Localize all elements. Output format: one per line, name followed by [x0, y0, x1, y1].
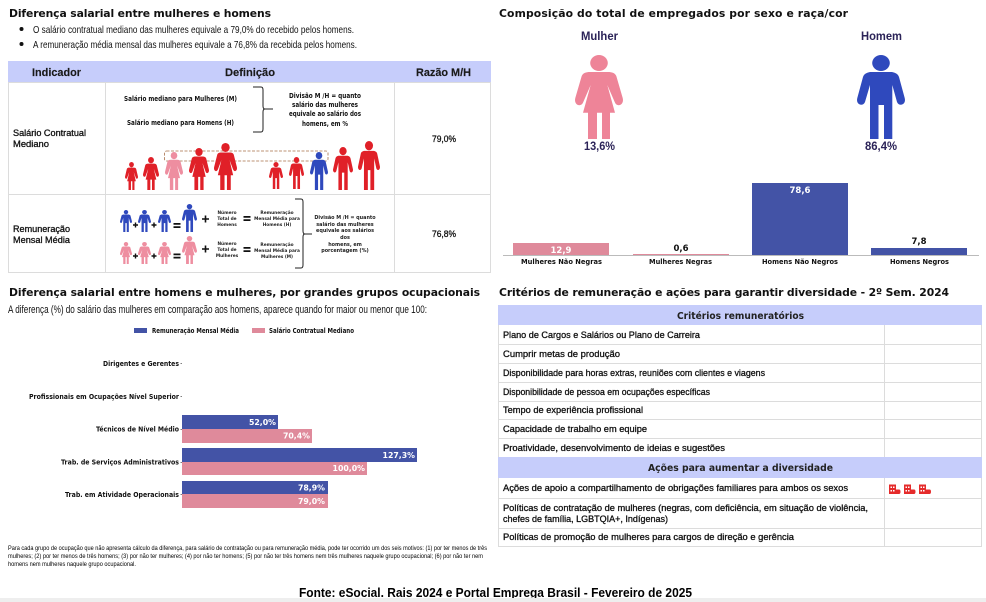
- definição: salário contratual mediano: salário das mulheres: [292, 101, 358, 109]
- panel: tabela de indicadores: [8, 61, 491, 273]
- definição: remuneração mensal média: Homens: [217, 222, 237, 228]
- gráfico de barras: grupos ocupacionais: 70,4%: [283, 432, 310, 440]
- panel: tabela de critérios: Plano de Cargos e Salários ou Plano de Carreira: [503, 330, 700, 340]
- panel: tabela de indicadores: Mediano: [13, 139, 49, 149]
- pictograma: mulher: 13,6%: [584, 141, 615, 153]
- panel: tabela de indicadores: Razão M/H: [416, 67, 471, 79]
- panel: tabela de critérios: Ações de apoio a compartilhamento de obrigações familiares para ambos os sexos: [503, 483, 849, 493]
- panel: tabela de critérios: Políticas de contratação de mulheres (negras, com deficiência, em situação de violência,: [503, 503, 868, 513]
- gráfico de barras: grupos ocupacionais: Trab. de Serviços Administrativos: [61, 458, 179, 466]
- gráfico de barras: grupos ocupacionais: Técnicos de Nível Médio: [96, 426, 179, 434]
- pictograma: mulher: [575, 31, 623, 153]
- definição: salário contratual mediano: homens, em %: [302, 120, 348, 128]
- definição: salário contratual mediano: Divisão M /H = quanto: [289, 92, 361, 100]
- fonte: Fonte: eSocial. Rais 2024 e Portal Emprega Brasil - Fevereiro de 2025: [299, 585, 692, 600]
- gráfico de barras: grupos ocupacionais: 78,9%: [298, 484, 325, 492]
- definição: remuneração mensal média: Mulheres (M): [261, 254, 293, 260]
- heading: composição: Composição do total de empregados por sexo e raça/cor: [499, 7, 849, 20]
- gráfico de barras: grupos ocupacionais: Trab. em Atividade Operacionais: [65, 491, 179, 499]
- nota de rodapé: homens nem mulheres naquele grupo ocupacional.: [8, 561, 136, 568]
- panel: tabela de indicadores: 76,8%: [432, 229, 456, 239]
- bullet list: A remuneração média mensal das mulheres equivale a 76,8% da recebida pelos homens.: [33, 39, 357, 51]
- gráfico de colunas: sexo e raça/cor: Mulheres Negras: [649, 258, 712, 266]
- panel: tabela de indicadores: Mensal Média: [13, 235, 70, 245]
- ícones: empresas: [889, 484, 931, 494]
- panel: tabela de indicadores: Indicador: [32, 67, 82, 79]
- subtítulo do gráfico: A diferença (%) do salário das mulheres em comparação aos homens, aparece quando for maior ou menor que 100:: [8, 304, 427, 316]
- heading: grandes grupos ocupacionais: Diferença salarial entre homens e mulheres, por grandes grupos ocupacionais: [9, 286, 480, 299]
- definição: remuneração mensal média: Homens (H): [263, 222, 291, 228]
- heading: critérios: Critérios de remuneração e ações para garantir diversidade - 2º Sem. 2024: [499, 286, 949, 299]
- panel: tabela de critérios: [498, 305, 982, 547]
- definição: remuneração mensal média: homens, em: [328, 242, 362, 248]
- panel: tabela de critérios: Capacidade de trabalho em equipe: [503, 424, 647, 434]
- pictograma: homem: [857, 31, 905, 153]
- panel: tabela de critérios: Disponibilidade de pessoa em ocupações específicas: [503, 387, 710, 397]
- definição: remuneração mensal média: Remuneração: [260, 210, 294, 216]
- panel: tabela de critérios: Critérios remuneratórios: [677, 310, 804, 322]
- gráfico de colunas: sexo e raça/cor: [503, 183, 979, 266]
- panel: tabela de critérios: Tempo de experiência profissional: [503, 405, 643, 415]
- legenda: Salário Contratual Mediano: [269, 327, 354, 335]
- gráfico de barras: grupos ocupacionais: Profissionais em Ocupações Nível Superior: [29, 393, 180, 401]
- gráfico de barras: grupos ocupacionais: Dirigentes e Gerentes: [103, 360, 179, 368]
- definição: remuneração mensal média: dos: [340, 235, 350, 241]
- gráfico de barras: grupos ocupacionais: 127,3%: [383, 451, 415, 460]
- definição: remuneração mensal média: porcentagem (%): [321, 248, 369, 254]
- gráfico de barras: grupos ocupacionais: [29, 360, 417, 508]
- gráfico de barras: grupos ocupacionais: 52,0%: [249, 418, 276, 427]
- gráfico de colunas: sexo e raça/cor: Homens Negros: [890, 258, 949, 266]
- definição: remuneração mensal média: Número: [217, 240, 237, 247]
- gráfico de colunas: sexo e raça/cor: 0,6: [673, 244, 689, 254]
- panel: tabela de indicadores: Remuneração: [13, 224, 70, 234]
- bullet list: O salário contratual mediano das mulheres equivale a 79,0% do recebido pelos homens.: [33, 24, 354, 36]
- pictograma: mulher: Mulher: [581, 31, 619, 43]
- panel: tabela de indicadores: Salário Contratual: [13, 128, 86, 138]
- pictograma: homem: 86,4%: [865, 141, 897, 153]
- definição: salário contratual mediano: [124, 87, 380, 190]
- gráfico de colunas: sexo e raça/cor: Homens Não Negros: [762, 258, 838, 266]
- gráfico de barras: grupos ocupacionais: 79,0%: [298, 497, 325, 506]
- definição: remuneração mensal média: Número: [217, 209, 237, 216]
- definição: salário contratual mediano: Salário mediano para Homens (H): [127, 119, 234, 127]
- panel: tabela de indicadores: Definição: [225, 67, 275, 79]
- legenda: Remuneração Mensal Média: [152, 327, 239, 335]
- bullet list: [20, 24, 357, 51]
- definição: remuneração mensal média: equivale aos salários: [316, 227, 374, 234]
- definição: remuneração mensal média: salário das mulheres: [316, 221, 374, 228]
- panel: tabela de critérios: Proatividade, desenvolvimento de ideias e sugestões: [503, 443, 726, 453]
- heading: diferença salarial: Diferença salarial entre mulheres e homens: [9, 7, 271, 20]
- panel: tabela de critérios: Políticas de promoção de mulheres para cargos de direção e gerência: [503, 532, 794, 542]
- nota de rodapé: Para cada grupo de ocupação que não apresenta cálculo da diferença, para salário de contratação ou para remuneração média, pode ter ocorrido um dos seis motivos: (1) por ter menos de três: [8, 545, 488, 552]
- definição: remuneração mensal média: [120, 199, 376, 268]
- definição: remuneração mensal média: Total de: [217, 216, 237, 222]
- definição: remuneração mensal média: Mensal Média para: [254, 215, 300, 222]
- definição: salário contratual mediano: equivale ao salário dos: [289, 110, 361, 118]
- gráfico de barras: grupos ocupacionais: 100,0%: [333, 464, 365, 473]
- definição: remuneração mensal média: Mulheres: [216, 253, 239, 259]
- panel: tabela de critérios: Ações para aumentar a diversidade: [648, 463, 833, 474]
- nota de rodapé: [8, 545, 488, 568]
- pictograma: homem: Homem: [861, 31, 902, 43]
- definição: remuneração mensal média: Remuneração: [260, 242, 294, 248]
- panel: tabela de critérios: chefes de família, LGBTQIA+, Indígenas): [503, 514, 668, 524]
- panel: tabela de critérios: Cumprir metas de produção: [503, 349, 620, 359]
- definição: salário contratual mediano: Salário mediano para Mulheres (M): [124, 95, 237, 103]
- gráfico de colunas: sexo e raça/cor: Mulheres Não Negras: [521, 258, 602, 266]
- panel: tabela de indicadores: 79,0%: [432, 134, 456, 144]
- definição: remuneração mensal média: Divisão M /H = quanto: [314, 215, 376, 221]
- gráfico de colunas: sexo e raça/cor: 78,6: [790, 186, 811, 196]
- legenda: [134, 327, 354, 335]
- nota de rodapé: mulheres; (2) por ter menos de três homens; (3) por não ter mulheres; (4) por não ter homens; (5) por não ter três homens nem três mulheres naquele grupo ocupacional; (6) por não ter nem: [8, 553, 483, 560]
- definição: remuneração mensal média: Total de: [217, 247, 237, 253]
- gráfico de colunas: sexo e raça/cor: 7,8: [911, 237, 927, 247]
- panel: tabela de critérios: Disponibilidade para horas extras, reuniões com clientes e viagens: [503, 368, 765, 378]
- gráfico de colunas: sexo e raça/cor: 12,9: [551, 246, 572, 256]
- definição: remuneração mensal média: Mensal Média para: [254, 247, 300, 254]
